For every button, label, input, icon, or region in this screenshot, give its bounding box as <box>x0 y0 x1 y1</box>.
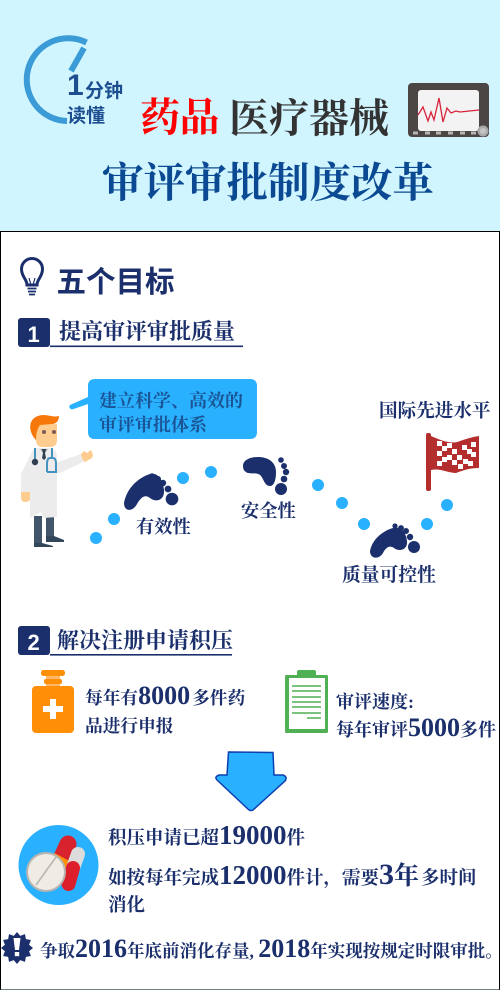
badge number 2: 2 <box>28 630 40 655</box>
badge number 1: 1 <box>28 322 40 347</box>
text: 1 <box>67 69 84 102</box>
arrow: down <box>216 752 286 810</box>
text: digestion time: 消化 <box>108 896 145 916</box>
footprint: quality control <box>370 523 420 558</box>
text: review speed: 审评速度: <box>336 692 414 712</box>
footprint: safety <box>243 457 289 495</box>
text: 读懂 <box>67 106 105 127</box>
icon: orange medicine bottle <box>32 670 74 733</box>
section 1 heading: 提高审评审批质量 <box>59 319 235 344</box>
badge: section 2 <box>18 626 232 656</box>
icon: warning badge <box>1 932 33 964</box>
icon: checkered flag <box>426 433 479 491</box>
label: effectiveness: 有效性 <box>136 517 191 537</box>
label: international level: 国际先进水平 <box>379 401 491 422</box>
speech bubble <box>69 379 257 439</box>
label: quality control: 质量可控性 <box>342 565 436 586</box>
text: yearly submissions <box>85 681 245 736</box>
text: backlog: 积压申请已超19000件 <box>108 820 305 850</box>
bubble text: 建立科学、高效的 <box>99 390 243 410</box>
bubble text <box>99 390 243 435</box>
label: safety: 安全性 <box>241 500 296 520</box>
heading: five goals: 五个目标 <box>56 266 175 299</box>
text: review speed <box>336 692 496 742</box>
text: 分钟 <box>85 81 123 102</box>
title line 1: 药品 <box>140 95 219 140</box>
icon: light bulb <box>22 258 42 294</box>
illustration: doctor <box>21 415 93 547</box>
icon: pills <box>18 825 98 905</box>
text: digestion time: 如按每年完成12000件计，需要3年多时间 <box>108 858 477 891</box>
section 2 heading: 解决注册申请积压 <box>57 628 233 653</box>
path dots <box>90 466 453 544</box>
icon: monitor <box>408 83 489 137</box>
footprint: effectiveness <box>124 473 178 510</box>
text: one minute <box>67 69 123 127</box>
text: yearly submissions: 品进行申报 <box>85 716 173 736</box>
icon: green clipboard <box>285 670 328 733</box>
title line 1 medical devices: 医疗器械 <box>229 96 389 141</box>
badge: section 1 <box>18 318 243 347</box>
text: review speed: 每年审评5000多件 <box>336 713 496 742</box>
text: digestion time <box>108 858 477 916</box>
icon: one minute timer <box>27 38 86 121</box>
bubble text: 审评审批体系 <box>99 415 207 435</box>
text: yearly submissions: 每年有8000多件药 <box>85 681 245 710</box>
text: goals: 争取2016年底前消化存量, 2018年实现按规定时限审批。 <box>40 934 500 963</box>
panel: main content <box>0 231 500 990</box>
title line 2: 审评审批制度改革 <box>102 160 434 206</box>
